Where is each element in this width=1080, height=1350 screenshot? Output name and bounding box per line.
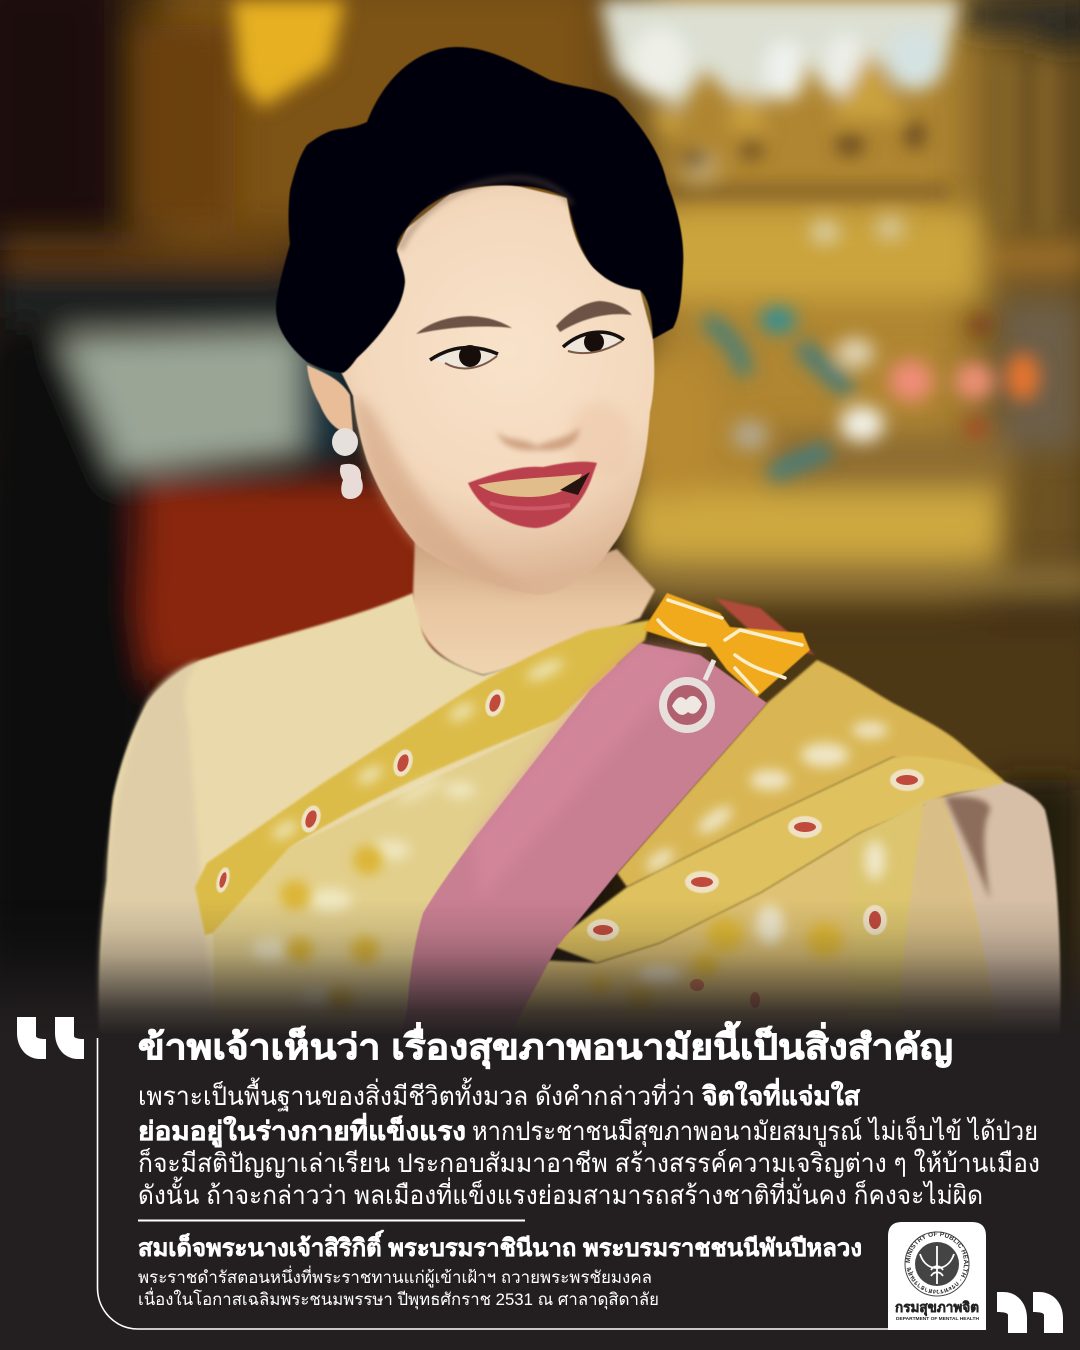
attribution divider: [138, 1220, 525, 1222]
right shoulder embroidery: [617, 660, 1003, 887]
source note: พระราชดำรัสตอนหนึ่งที่พระราชทานแก่ผู้เข้าเฝ้าฯ ถวายพระพรชัยมงคล: [138, 1265, 652, 1288]
quote panel background: [0, 1034, 1080, 1350]
quote body text: [138, 1077, 1040, 1210]
neck: [413, 535, 655, 675]
yellow ribbon bow: [643, 593, 810, 697]
pearl earring: [332, 428, 363, 499]
sleeve shade: [99, 660, 215, 1040]
photo: portrait figure: [99, 47, 1060, 1040]
hairline strands: [400, 178, 572, 250]
hair: [276, 47, 683, 373]
source note: เนื่องในโอกาสเฉลิมพระชนมพรรษา ปีพุทธศักราช 2531 ณ ศาลาดุสิดาลัย: [138, 1287, 659, 1310]
quote body text: จิตใจที่แจ่มใส: [702, 1077, 860, 1111]
shoulder highlights: [643, 722, 888, 875]
attribution name: สมเด็จพระนางเจ้าสิริกิติ์ พระบรมราชินีนาถ พระบรมราชชนนีพันปีหลวง: [138, 1230, 862, 1262]
quote frame line: [98, 1038, 890, 1329]
embroidery motifs: [214, 687, 924, 1008]
vertical border: [850, 800, 925, 1040]
quote body text: ย่อมอยู่ในร่างกายที่แข็งแรง: [138, 1112, 466, 1148]
quote body text: ก็จะมีสติปัญญาเล่าเรียน ประกอบสัมมาอาชีพ สร้างสรรค์ความเจริญต่าง ๆ ให้บ้านเมือง: [138, 1147, 1040, 1178]
right sleeve: [943, 782, 1060, 1040]
face shading: [353, 396, 537, 595]
left eye: [430, 345, 498, 368]
nose: [497, 427, 580, 450]
quote body text: ดังนั้น ถ้าจะกล่าวว่า พลเมืองที่แข็งแรงย่อมสามารถสร้างชาติที่มั่นคง ก็คงจะไม่ผิด: [138, 1176, 983, 1210]
left eyebrow: [416, 316, 512, 334]
ear: [307, 365, 353, 432]
right eyebrow: [556, 301, 632, 332]
left band highlights: [252, 656, 566, 1010]
lower right pattern: [500, 797, 1020, 1040]
logo: Department of Mental Health: MINISTRY OF PUBLIC HEALTH · กระทรวงสาธารณสุข: [906, 1232, 968, 1294]
blouse: [99, 593, 640, 1040]
quote body text: หากประชาชนมีสุขภาพอนามัยสมบูรณ์ ไม่เจ็บไข้ ได้ป่วย: [472, 1115, 1038, 1147]
right lower yellow flowers: [590, 917, 843, 1013]
logo: Department of Mental Health: DEPARTMENT OF MENTAL HEALTH: [896, 1316, 980, 1321]
logo: Department of Mental Health: กรมสุขภาพจิต: [895, 1299, 979, 1316]
logo: Department of Mental Health: [888, 1222, 986, 1330]
headline: ข้าพเจ้าเห็นว่า เรื่องสุขภาพอนามัยนี้เป็นสิ่งสำคัญ: [138, 1021, 953, 1069]
right eye: [563, 332, 624, 353]
right lace panel: [900, 797, 1000, 1040]
gold ribbon border: [550, 756, 1010, 963]
blush: [568, 402, 632, 478]
gold embroidered left band: [195, 620, 650, 935]
source note: [138, 1265, 659, 1310]
face: [340, 185, 654, 595]
opening quotation mark: [17, 1017, 84, 1059]
royal brooch: [659, 660, 715, 733]
lips: [468, 462, 597, 528]
sash shadow ribbon behind bow: [715, 598, 815, 655]
bottom dark gradient: [0, 900, 1080, 1035]
closing quotation mark: [997, 1292, 1063, 1333]
quote body text: เพราะเป็นพื้นฐานของสิ่งมีชีวิตทั้งมวล ดังคำกล่าวที่ว่า: [138, 1077, 695, 1112]
pink sash: [400, 643, 767, 1040]
shawl pattern area below band: [213, 690, 590, 1040]
sleeve shadow: [945, 797, 990, 900]
